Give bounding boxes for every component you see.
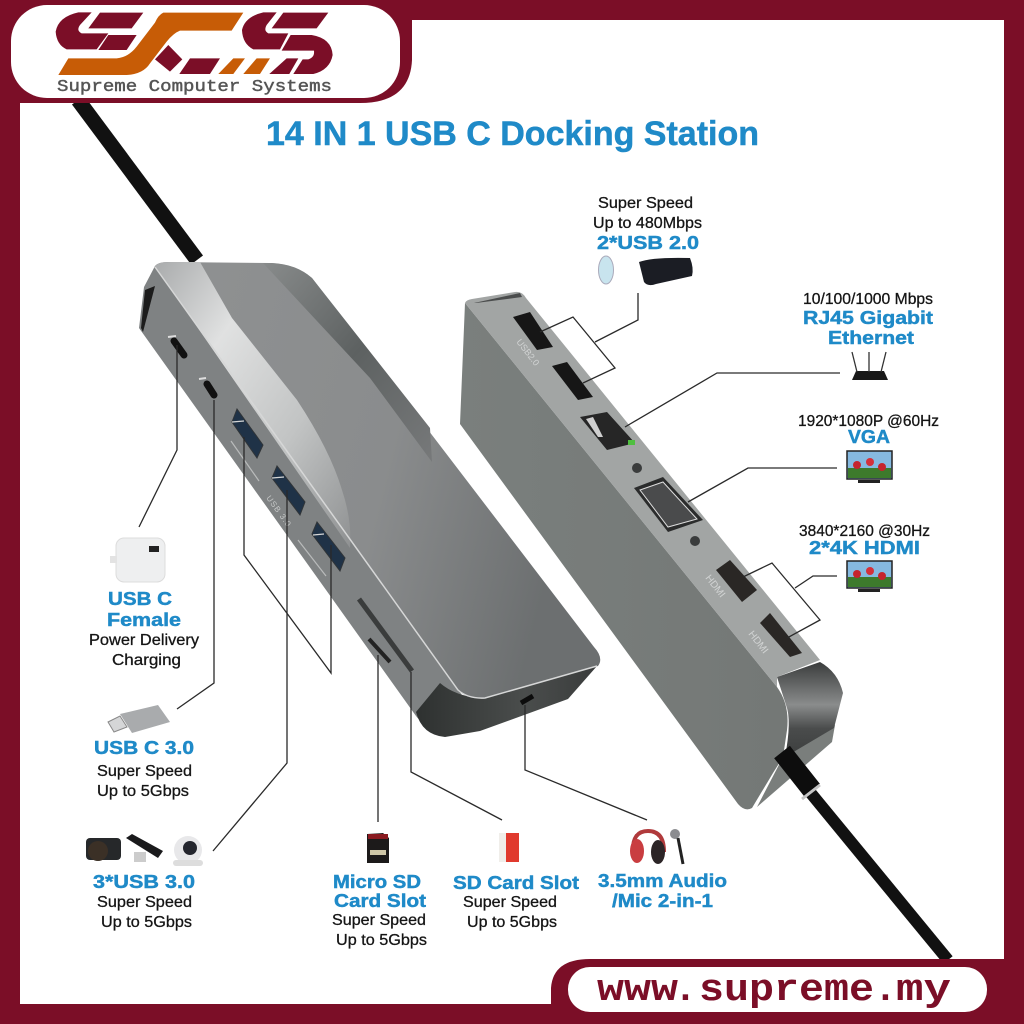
URL text: supreme	[699, 969, 874, 1012]
label: VGA: 1920*1080P @60Hz	[798, 413, 939, 430]
port: USB 3.0 three	[298, 522, 345, 576]
screw bottom	[690, 536, 700, 546]
label: SD Card Slot	[453, 873, 579, 931]
icon: camera, flash drive, webcam	[86, 834, 203, 866]
label: RJ45 Gigabit Ethernet: RJ45 Gigabit	[803, 308, 933, 328]
USB-C port: power delivery	[168, 336, 184, 355]
port labels on right dock: HDMI	[746, 629, 770, 656]
label: SD Card Slot: Super Speed	[463, 894, 557, 911]
dock: left unit with USB-C, USB 3.0 and card ports	[139, 262, 600, 737]
port: HDMI one	[716, 560, 757, 602]
icon: router	[852, 352, 888, 380]
label: 3.5mm Audio/Mic: 3.5mm Audio	[598, 871, 727, 891]
logo pill	[11, 5, 400, 98]
audio jack	[521, 696, 533, 703]
left dock port side face	[139, 266, 462, 725]
label: Micro SD Card Slot	[332, 872, 427, 949]
label: USB C 3.0	[94, 738, 194, 800]
label: Micro SD Card Slot: Up to 5Gbps	[336, 932, 427, 949]
left dock edge highlight	[155, 267, 597, 698]
port: VGA	[634, 477, 703, 532]
icon: monitor VGA	[847, 451, 892, 483]
title: 14 IN 1 USB C Docking Station	[266, 115, 759, 153]
port: RJ45	[580, 412, 635, 450]
label: 2*USB 2.0	[593, 195, 702, 253]
left dock glossy swoosh	[155, 262, 350, 548]
label: USB C 3.0: Up to 5Gbps	[97, 783, 189, 800]
port labels on right dock	[514, 337, 770, 656]
port: HDMI two	[760, 613, 802, 657]
label: 3*USB 3.0: Super Speed	[97, 894, 192, 911]
URL text: www	[597, 969, 678, 1012]
cable: top left	[78, 100, 197, 260]
right dock end cap	[777, 662, 843, 757]
side slot	[141, 286, 155, 332]
label: USB C Female	[89, 589, 199, 669]
label: USB C Female: Female	[107, 610, 181, 630]
port: USB 3.0 one	[231, 409, 263, 481]
icon: USB-C adapter	[108, 705, 170, 733]
dock: right unit with USB 2.0, RJ45, VGA and HDMI ports	[460, 292, 843, 809]
left dock rear shading	[263, 263, 432, 462]
label: 2*4K HDMI: 3840*2160 @30Hz	[799, 523, 930, 540]
USB-C port: data	[199, 378, 214, 395]
label: SD Card Slot: Up to 5Gbps	[467, 914, 557, 931]
SD card slot	[359, 599, 412, 671]
callout lines	[139, 293, 840, 851]
icon: monitor HDMI	[847, 561, 892, 592]
label: Micro SD Card Slot: Card Slot	[334, 891, 426, 911]
label: USB C Female: Charging	[112, 652, 181, 669]
label: 3.5mm Audio/Mic: /Mic 2-in-1	[612, 891, 713, 911]
label: 3*USB 3.0: Up to 5Gbps	[101, 914, 192, 931]
right dock lower end	[757, 725, 835, 807]
label: 2*USB 2.0: 2*USB 2.0	[597, 233, 699, 253]
label: 3*USB 3.0: 3*USB 3.0	[93, 872, 195, 892]
label: VGA	[798, 413, 939, 447]
label: Micro SD Card Slot: Micro SD	[333, 872, 421, 892]
port: USB 2.0 two	[552, 362, 593, 400]
left dock end face	[416, 666, 597, 737]
left dock top face	[155, 262, 600, 698]
label: SD Card Slot: SD Card Slot	[453, 873, 579, 893]
label: 3.5mm Audio/Mic	[598, 871, 727, 911]
port: USB 2.0 one	[513, 312, 553, 350]
URL text: .	[674, 969, 697, 1012]
top vent	[474, 293, 522, 303]
label: Micro SD Card Slot: Super Speed	[332, 912, 426, 929]
cable: bottom right	[782, 752, 948, 960]
logo: company name: Supreme Computer Systems	[57, 77, 332, 96]
label: 2*USB 2.0: Super Speed	[598, 195, 693, 212]
URL pill	[568, 967, 987, 1012]
icon: white charger	[110, 538, 165, 582]
label: 3*USB 3.0	[93, 872, 195, 931]
URL text: my	[896, 969, 951, 1012]
label: VGA: VGA	[848, 427, 890, 447]
label: USB C 3.0: USB C 3.0	[94, 738, 194, 758]
right dock side face	[460, 303, 788, 809]
logo: SCS mark	[56, 12, 333, 75]
screw top	[632, 463, 642, 473]
port labels on left dock: USB 3.0	[264, 494, 293, 529]
label: USB C 3.0: Super Speed	[97, 763, 192, 780]
icon: headphones and microphone	[630, 829, 683, 864]
icon: keyboard	[639, 258, 693, 285]
label: RJ45 Gigabit Ethernet: Ethernet	[828, 328, 914, 348]
right dock port strip	[465, 292, 820, 687]
label: 2*4K HDMI	[799, 523, 930, 558]
port labels on right dock: USB2.0	[514, 337, 541, 368]
micro SD card slot	[369, 639, 390, 662]
label: USB C Female: Power Delivery	[89, 632, 199, 649]
icon: micro SD card	[499, 833, 519, 862]
URL text: .	[874, 969, 897, 1012]
icon: SD card	[367, 833, 389, 863]
label: RJ45 Gigabit Ethernet	[803, 291, 933, 348]
label: USB C Female: USB C	[108, 589, 172, 609]
label: RJ45 Gigabit Ethernet: 10/100/1000 Mbps	[803, 291, 933, 308]
port labels on right dock: HDMI	[703, 573, 727, 600]
port: USB 3.0 two	[272, 466, 305, 515]
label: 2*4K HDMI: 2*4K HDMI	[809, 538, 920, 558]
URL text	[597, 969, 951, 1012]
icon: mouse	[598, 256, 614, 284]
label: 2*USB 2.0: Up to 480Mbps	[593, 215, 702, 232]
